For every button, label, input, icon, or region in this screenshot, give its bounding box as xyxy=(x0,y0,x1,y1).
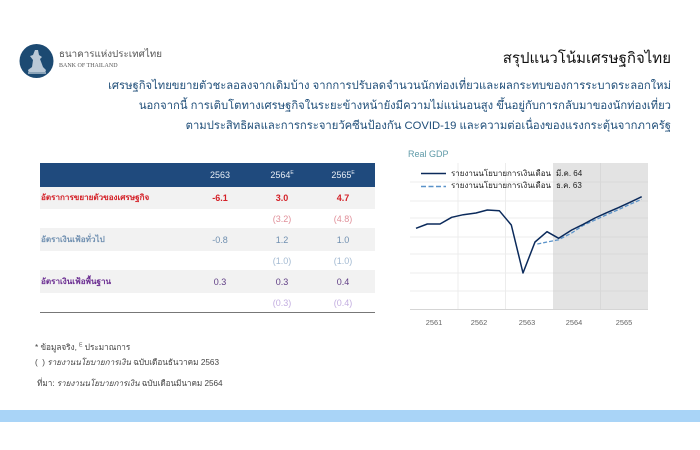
x axis labels: 2563 xyxy=(519,318,535,327)
x axis labels: 2565 xyxy=(616,318,632,327)
table header row: 2564E xyxy=(270,170,294,180)
footnotes xyxy=(35,342,222,388)
solid series: March 2021 report xyxy=(416,197,642,273)
table: economic forecasts xyxy=(40,163,375,313)
table: economic forecasts: อัตราเงินเฟ้อทั่วไป xyxy=(41,235,105,244)
footnotes: ( ) รายงานนโยบายการเงิน ฉบับเดือนธันวาคม 2563 xyxy=(35,358,219,367)
chart heading: Real GDP xyxy=(408,149,449,159)
bank name English: BANK OF THAILAND xyxy=(59,63,118,69)
legend: รายงานนโยบายการเงินเดือน xyxy=(451,168,552,178)
table: economic forecasts: 0.3 xyxy=(276,277,288,287)
row: headline inflation previous forecast: (1.0) xyxy=(273,256,291,266)
line chart: Real GDP xyxy=(410,163,648,327)
table: economic forecasts: 0.4 xyxy=(337,277,349,287)
table header row xyxy=(40,163,375,187)
bank name Thai: ธนาคารแห่งประเทศไทย xyxy=(59,49,162,60)
table: economic forecasts: -0.8 xyxy=(212,235,228,245)
table header row: 2563 xyxy=(210,170,230,180)
row: core inflation xyxy=(40,270,375,293)
row: GDP growth xyxy=(40,187,375,209)
table: economic forecasts: (1.0) xyxy=(334,256,352,266)
dashed series: December 2020 report xyxy=(537,199,642,244)
row: GDP previous forecast: (3.2) xyxy=(273,214,291,224)
table: economic forecasts: 0.3 xyxy=(214,277,226,287)
table header row: 2565E xyxy=(331,170,355,180)
table: economic forecasts: -6.1 xyxy=(212,193,228,203)
table: economic forecasts: 1.0 xyxy=(337,235,349,245)
summary text xyxy=(108,77,671,132)
x axis labels: 2561 xyxy=(426,318,442,327)
row: core inflation previous forecast: (0.3) xyxy=(273,298,291,308)
title: สรุปแนวโน้มเศรษฐกิจไทย xyxy=(503,50,671,67)
legend: ธ.ค. 63 xyxy=(556,181,582,190)
legend: รายงานนโยบายการเงินเดือน xyxy=(451,180,552,190)
table: economic forecasts: 4.7 xyxy=(337,193,349,203)
legend: มี.ค. 64 xyxy=(556,169,583,178)
x axis labels xyxy=(426,318,632,327)
x axis labels: 2562 xyxy=(471,318,487,327)
logo emblem xyxy=(20,44,54,78)
footnotes: * ข้อมูลจริง, E ประมาณการ xyxy=(35,342,130,352)
summary text: เศรษฐกิจไทยขยายตัวชะลอลงจากเดิมบ้าง จากการปรับลดจำนวนนักท่องเที่ยวและผลกระทบของการระบาดระลอกใหม่ xyxy=(108,80,671,92)
x axis labels: 2564 xyxy=(566,318,582,327)
table: economic forecasts: (0.4) xyxy=(334,298,352,308)
table: economic forecasts: อัตราเงินเฟ้อพื้นฐาน xyxy=(41,277,111,286)
legend xyxy=(421,168,583,190)
bottom band xyxy=(0,410,700,422)
logo: Bank of Thailand xyxy=(20,44,162,78)
table: economic forecasts: 1.2 xyxy=(276,235,288,245)
summary text: นอกจากนี้ การเติบโตทางเศรษฐกิจในระยะข้างหน้ายังมีความไม่แน่นอนสูง ขึ้นอยู่กับการกลับมาของนักท่องเที่ยว xyxy=(139,100,671,112)
summary text: ตามประสิทธิผลและการกระจายวัคซีนป้องกัน COVID-19 และความต่อเนื่องของแรงกระตุ้นจากภาครัฐ xyxy=(186,120,671,132)
footnotes: ที่มา: รายงานนโยบายการเงิน ฉบับเดือนมีนาคม 2564 xyxy=(37,379,222,388)
table: economic forecasts: 3.0 xyxy=(276,193,288,203)
table: economic forecasts: อัตราการขยายตัวของเศรษฐกิจ xyxy=(41,193,149,202)
row: headline inflation xyxy=(40,228,375,251)
table: economic forecasts: (4.8) xyxy=(334,214,352,224)
